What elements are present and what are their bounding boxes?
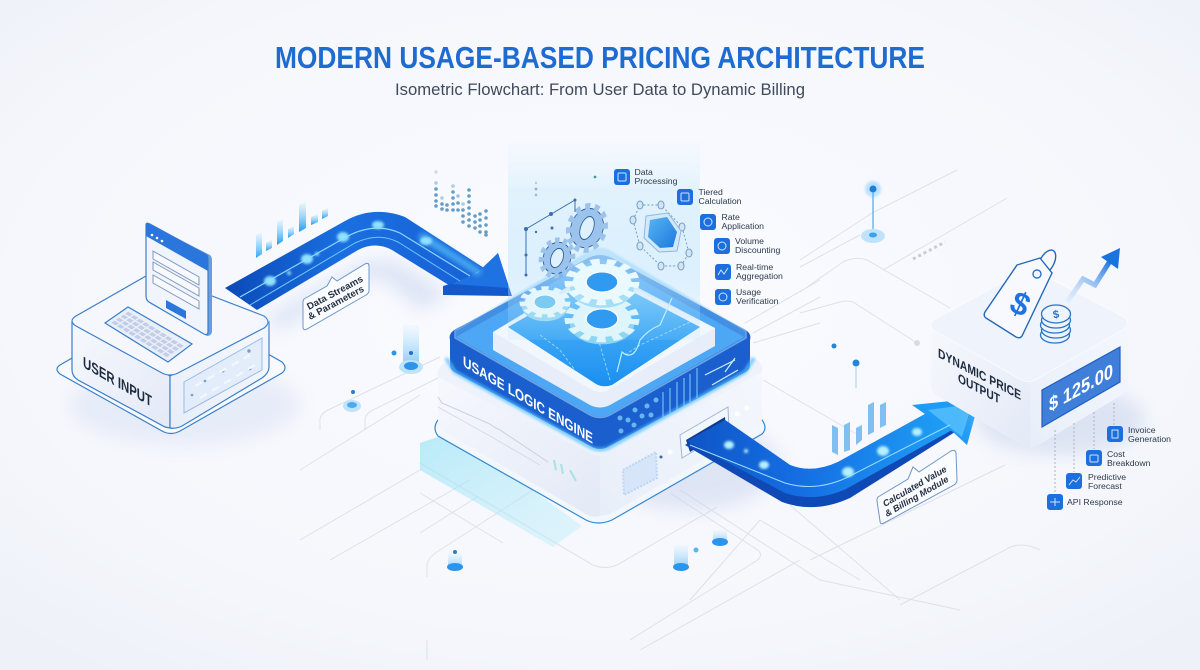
user input label: USER INPUT xyxy=(83,353,153,411)
gray node dot xyxy=(914,340,920,346)
pin: small xyxy=(832,344,860,388)
keyboard xyxy=(105,307,192,362)
item: real-time aggregation: Aggregation xyxy=(736,271,783,281)
list: output functions xyxy=(1047,425,1171,510)
beacon: small left xyxy=(343,390,361,412)
right face xyxy=(170,322,269,428)
item: predictive forecast xyxy=(1066,472,1126,491)
pin: top right xyxy=(861,181,885,243)
item: real-time aggregation xyxy=(715,262,783,281)
title: MODERN USAGE-BASED PRICING ARCHITECTURE xyxy=(275,40,925,75)
indicator dots xyxy=(668,406,750,454)
item: data processing: Processing xyxy=(634,176,678,186)
callout: data streams xyxy=(303,263,369,330)
hexagon network xyxy=(630,201,692,270)
beacon: lower center xyxy=(673,530,728,571)
light pulses xyxy=(264,221,432,286)
monitor window xyxy=(146,223,212,336)
beacon: left floor xyxy=(392,325,423,374)
left face xyxy=(72,322,170,428)
top face xyxy=(931,270,1128,382)
white layer xyxy=(493,270,715,408)
item: data processing xyxy=(614,167,678,186)
list: engine functions xyxy=(614,167,783,306)
usage logic engine xyxy=(435,248,765,523)
top face xyxy=(72,274,268,375)
network bracket xyxy=(524,176,596,276)
arrow: calculated value xyxy=(680,398,980,507)
arrow shadow xyxy=(265,260,450,330)
bar chart: output xyxy=(832,402,886,455)
item: real-time aggregation: Real-time xyxy=(736,262,773,272)
coin stack xyxy=(1040,305,1070,343)
item: usage verification: Verification xyxy=(736,296,779,306)
engine shadow xyxy=(600,420,780,510)
item: volume discounting: Discounting xyxy=(735,245,781,255)
floor light spill xyxy=(420,432,582,547)
upright gear small xyxy=(536,236,578,280)
price tag xyxy=(984,247,1059,338)
coin stack: $ xyxy=(1052,309,1060,321)
price tag: $ xyxy=(1005,284,1036,324)
small gray dash row xyxy=(913,242,945,259)
item: cost breakdown: Cost xyxy=(1107,449,1125,459)
bar chart: input xyxy=(256,202,328,258)
base top xyxy=(438,287,762,456)
inner circuit panel xyxy=(508,276,700,386)
block: user input xyxy=(57,223,285,434)
dot matrix chart xyxy=(434,170,488,237)
arrow head xyxy=(443,253,512,296)
trend sparkline xyxy=(617,298,672,372)
flow streams xyxy=(240,228,470,297)
item: tiered calculation: Tiered xyxy=(698,187,723,197)
callout: calculated value: Calculated Value xyxy=(881,464,948,509)
item: volume discounting xyxy=(714,236,781,255)
callout: calculated value xyxy=(877,450,957,524)
item: predictive forecast: Predictive xyxy=(1088,472,1126,482)
beacon: lower left xyxy=(447,550,463,571)
upright gear large xyxy=(563,201,611,255)
item: rate application xyxy=(700,212,764,231)
callout: calculated value: & Billing Module xyxy=(883,474,950,519)
flat gear lower xyxy=(569,299,635,344)
right face xyxy=(1030,323,1128,447)
item: invoice generation: Generation xyxy=(1128,434,1171,444)
dashed leaders xyxy=(1055,403,1114,492)
item: rate application: Application xyxy=(722,221,764,231)
item: invoice generation xyxy=(1107,425,1171,444)
gears xyxy=(522,201,635,344)
base plate xyxy=(435,335,765,523)
status panel xyxy=(184,338,262,413)
item: cost breakdown xyxy=(1086,449,1151,468)
blue layer top xyxy=(456,260,744,416)
item: cost breakdown: Breakdown xyxy=(1107,458,1151,468)
vent dots xyxy=(623,452,657,495)
glow shadow: user input xyxy=(70,365,300,445)
glass projection panel xyxy=(508,140,700,340)
arrow body light xyxy=(687,414,952,497)
item: predictive forecast: Forecast xyxy=(1088,481,1122,491)
side circuit traces xyxy=(618,358,738,434)
port xyxy=(680,407,729,458)
base right face xyxy=(600,372,762,516)
item: rate application: Rate xyxy=(722,212,740,222)
flat gear upper xyxy=(569,262,635,308)
flat gear small xyxy=(522,288,568,321)
base left face xyxy=(438,375,600,517)
callout: data streams: & Parameters xyxy=(306,284,366,323)
flow streams xyxy=(690,425,950,487)
arrow body xyxy=(225,212,484,310)
arrow head xyxy=(912,398,980,445)
engine side title: USAGE LOGIC ENGINE xyxy=(463,353,593,448)
arrow body dark xyxy=(685,414,955,507)
item: data processing: Data xyxy=(634,167,653,177)
item: tiered calculation: Calculation xyxy=(698,196,742,206)
left face xyxy=(931,325,1030,447)
output block shadow xyxy=(975,385,1145,455)
item: volume discounting: Volume xyxy=(735,236,764,246)
circuit floor lines xyxy=(300,170,1040,660)
item: invoice generation: Invoice xyxy=(1128,425,1156,435)
item: usage verification: Usage xyxy=(736,287,761,297)
price display xyxy=(1042,347,1120,427)
item: tiered calculation xyxy=(677,187,742,206)
base plate xyxy=(57,302,285,434)
block: dynamic price output xyxy=(931,247,1128,492)
dynamic price label: DYNAMIC PRICE xyxy=(938,345,1021,403)
block: dynamic price output: OUTPUT xyxy=(958,370,1000,407)
trend arrow xyxy=(1067,248,1120,302)
arrow: data streams xyxy=(225,212,512,330)
base left groove xyxy=(438,397,548,462)
item: api response: API Response xyxy=(1067,497,1123,507)
translucent top frame xyxy=(455,248,746,418)
blue layer xyxy=(450,255,750,449)
item: usage verification xyxy=(715,287,779,306)
callout: data streams: Data Streams xyxy=(305,274,365,313)
light pulses xyxy=(724,428,922,477)
price display: $ 125.00 xyxy=(1049,359,1113,417)
subtitle: Isometric Flowchart: From User Data to Dynamic Billing xyxy=(395,80,805,99)
